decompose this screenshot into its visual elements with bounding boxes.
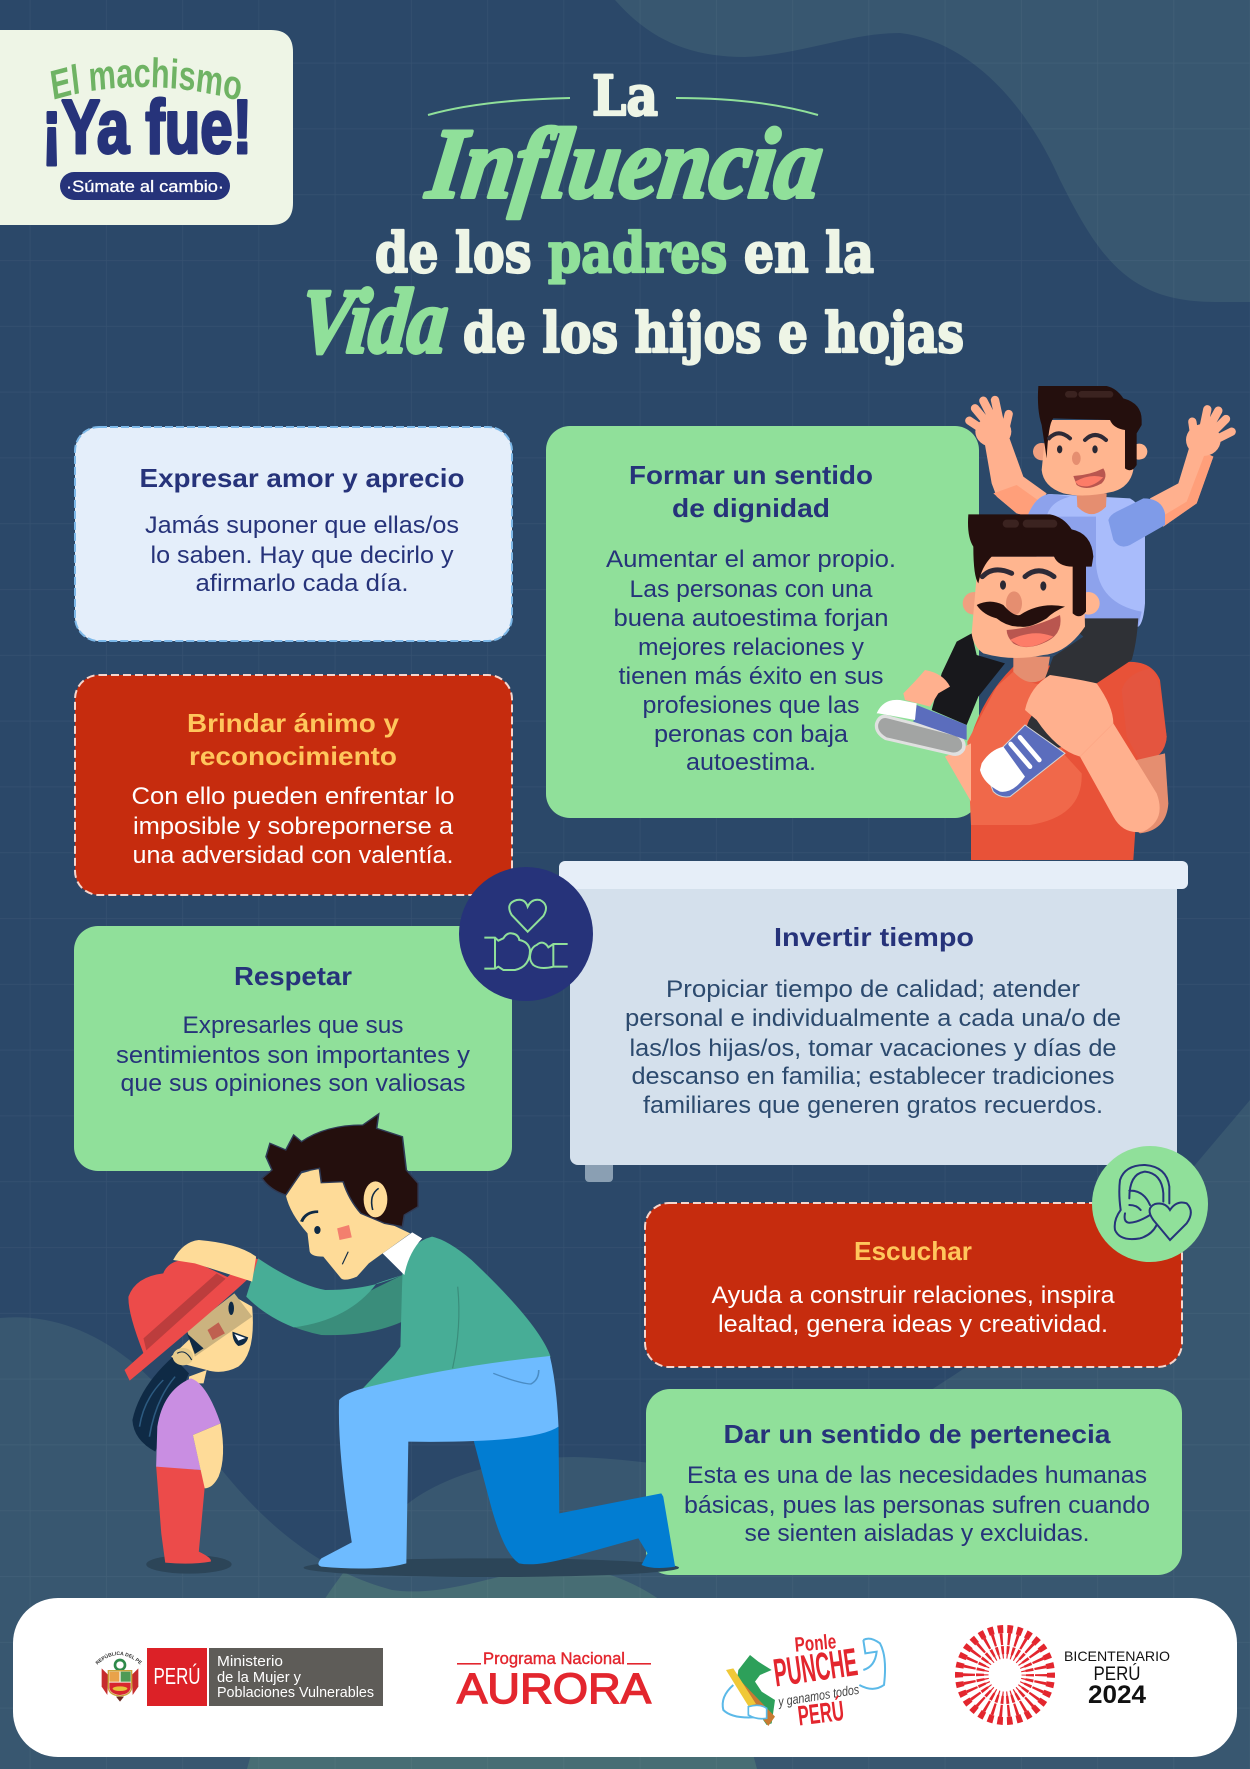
card: Formar un sentido de dignidad: autoestima. bbox=[686, 749, 816, 776]
son arms and hands bbox=[969, 400, 1232, 527]
logo: Bicentenario Peru 2024: 2024 bbox=[1088, 1681, 1146, 1709]
title: Influencia bbox=[421, 107, 830, 219]
card: Expresar amor y aprecio: afirmarlo cada día. bbox=[196, 570, 408, 597]
logo: Bicentenario Peru 2024: BICENTENARIO bbox=[1064, 1648, 1170, 1664]
card: Escuchar: Ayuda a construir relaciones, inspira bbox=[712, 1282, 1115, 1309]
card: Respetar bbox=[74, 926, 512, 1171]
father shirt bbox=[971, 662, 1167, 860]
logo: Ponle Punche: PUNCHE bbox=[771, 1640, 860, 1695]
card: Brindar ánimo y reconocimiento: Brindar ánimo y bbox=[187, 708, 400, 738]
ground shadows bbox=[146, 1555, 679, 1577]
logo: Programa Nacional Aurora: Programa Nacional bbox=[483, 1649, 625, 1668]
card: Brindar ánimo y reconocimiento: imposible y sobreporner­se a bbox=[133, 813, 454, 840]
card: Formar un sentido de dignidad: profesiones que las bbox=[642, 692, 860, 719]
logo: Bicentenario Peru 2024 bbox=[959, 1629, 1170, 1721]
card: Brindar ánimo y reconocimiento: una adversidad con valentía. bbox=[132, 842, 454, 869]
logo: Ponle Punche: PERÚ bbox=[796, 1695, 846, 1731]
logo: Bicentenario Peru 2024: PERÚ bbox=[1094, 1663, 1140, 1685]
card: Brindar ánimo y reconocimiento: reconocimiento bbox=[189, 741, 397, 771]
panel: Invertir tiempo: las/los hijas/os, tomar vacaciones y días de bbox=[630, 1035, 1116, 1062]
card: Formar un sentido de dignidad: buena autoestima forjan bbox=[614, 605, 888, 632]
son head bbox=[1033, 386, 1147, 495]
background blob overlap bbox=[247, 1574, 757, 1769]
card: Formar un sentido de dignidad: Aumentar el amor propio. bbox=[606, 546, 896, 573]
panel: Invertir tiempo bbox=[559, 861, 1188, 1182]
card: Brindar ánimo y reconocimiento bbox=[75, 675, 512, 895]
title: Vida bbox=[296, 270, 453, 372]
card: Formar un sentido de dignidad: peronas con baja bbox=[654, 721, 849, 748]
panel: Invertir tiempo: Propiciar tiempo de calidad; atender bbox=[666, 976, 1080, 1003]
logo: Programa Nacional Aurora: AURORA bbox=[457, 1665, 651, 1713]
card: Respetar: Expresarles que sus bbox=[182, 1012, 404, 1039]
title: La bbox=[592, 63, 658, 128]
card: Escuchar bbox=[645, 1203, 1182, 1367]
card: Brindar ánimo y reconocimiento: Con ello pueden enfrentar lo bbox=[132, 783, 454, 810]
card: Formar un sentido de dignidad: tienen más éxito en sus bbox=[618, 663, 884, 690]
card: Expresar amor y aprecio: lo saben. Hay que decirlo y bbox=[150, 542, 454, 569]
illustration: father kneeling with daughter bbox=[125, 1114, 679, 1577]
card: Expresar amor y aprecio: Jamás suponer que ellas/os bbox=[145, 512, 459, 539]
logo: El machismo Ya fue: ·Súmate al cambio· bbox=[66, 178, 224, 196]
title bbox=[296, 63, 964, 372]
girl bbox=[125, 1258, 263, 1564]
son left shoe bbox=[875, 700, 967, 756]
background blob: bottom right bbox=[247, 1100, 1250, 1769]
card: Respetar: que sus opiniones son valiosas bbox=[120, 1070, 466, 1097]
background blob: bottom left bbox=[0, 1317, 757, 1769]
card: Formar un sentido de dignidad: Formar un sentido bbox=[629, 460, 873, 490]
panel: Invertir tiempo: familiares que generen gratos recuerdos. bbox=[643, 1092, 1103, 1119]
logo: El machismo Ya fue bbox=[0, 30, 293, 225]
father bbox=[173, 1114, 675, 1569]
logo: Ponle Punche: y ganamos todos bbox=[776, 1682, 860, 1709]
logo: Peru coat of arms bbox=[95, 1652, 142, 1702]
icon: ear with heart bbox=[1092, 1146, 1208, 1262]
logo: El machismo Ya fue: ¡Ya fue! bbox=[42, 85, 252, 170]
card: Dar un sentido de pertenecia: básicas, pues las personas sufren cuando bbox=[684, 1492, 1150, 1519]
card: Formar un sentido de dignidad bbox=[546, 426, 979, 818]
illustration: father carrying son bbox=[875, 386, 1232, 860]
card: Formar un sentido de dignidad: de dignidad bbox=[672, 493, 830, 523]
panel: Invertir tiempo: descanso en familia; establecer tradiciones bbox=[632, 1063, 1114, 1090]
logo: Ministerio de la Mujer: PERÚ bbox=[154, 1663, 200, 1689]
card: Dar un sentido de pertenecia: Esta es una de las necesidades humanas bbox=[687, 1462, 1147, 1489]
logo: Ponle Punche: Ponle bbox=[794, 1630, 837, 1657]
card: Formar un sentido de dignidad: Las personas con una bbox=[630, 576, 873, 603]
title: de los padres en la bbox=[375, 220, 874, 285]
father arm and hands bbox=[903, 670, 1168, 833]
title: de los hijos e hojas bbox=[463, 300, 964, 365]
father head bbox=[963, 514, 1100, 658]
card: Expresar amor y aprecio: Expresar amor y aprecio bbox=[140, 463, 464, 493]
footer band bbox=[13, 1598, 1237, 1757]
logo: Ponle Punche bbox=[723, 1630, 885, 1731]
logo: El machismo Ya fue: El machismo bbox=[50, 57, 241, 100]
card: Escuchar: lealtad, genera ideas y creatividad. bbox=[718, 1311, 1108, 1338]
panel: Invertir tiempo: personal e individualmente a cada una/o de bbox=[625, 1005, 1121, 1032]
card: Dar un sentido de pertenecia: se sienten aisladas y excluidas. bbox=[744, 1520, 1090, 1547]
card: Dar un sentido de pertenecia bbox=[646, 1389, 1182, 1575]
card: Formar un sentido de dignidad: mejores relaciones y bbox=[638, 634, 864, 661]
card: Respetar: sentimientos son importantes y bbox=[116, 1042, 470, 1069]
son legs bbox=[932, 633, 1005, 725]
card: Dar un sentido de pertenecia: Dar un sentido de pertenecia bbox=[724, 1419, 1111, 1449]
background blob: top right bbox=[615, 0, 1250, 302]
card: Expresar amor y aprecio bbox=[75, 427, 512, 641]
logo: Ministerio de la Mujer bbox=[147, 1648, 383, 1706]
son right shoe bbox=[980, 725, 1065, 797]
logo: Ministerio de la Mujer: Poblaciones Vulnerables bbox=[217, 1684, 374, 1701]
logo: Ministerio de la Mujer: de la Mujer y bbox=[217, 1669, 301, 1686]
logo: Peru coat of arms: REPÚBLICA DEL PERÚ bbox=[95, 1652, 142, 1665]
card: Respetar: Respetar bbox=[234, 961, 352, 991]
panel: Invertir tiempo: Invertir tiempo bbox=[774, 922, 974, 952]
logo: Ministerio de la Mujer: Ministerio bbox=[217, 1653, 283, 1670]
icon: handshake with heart bbox=[459, 867, 593, 1001]
card: Escuchar: Escuchar bbox=[854, 1236, 972, 1266]
son torso bbox=[1028, 494, 1145, 627]
